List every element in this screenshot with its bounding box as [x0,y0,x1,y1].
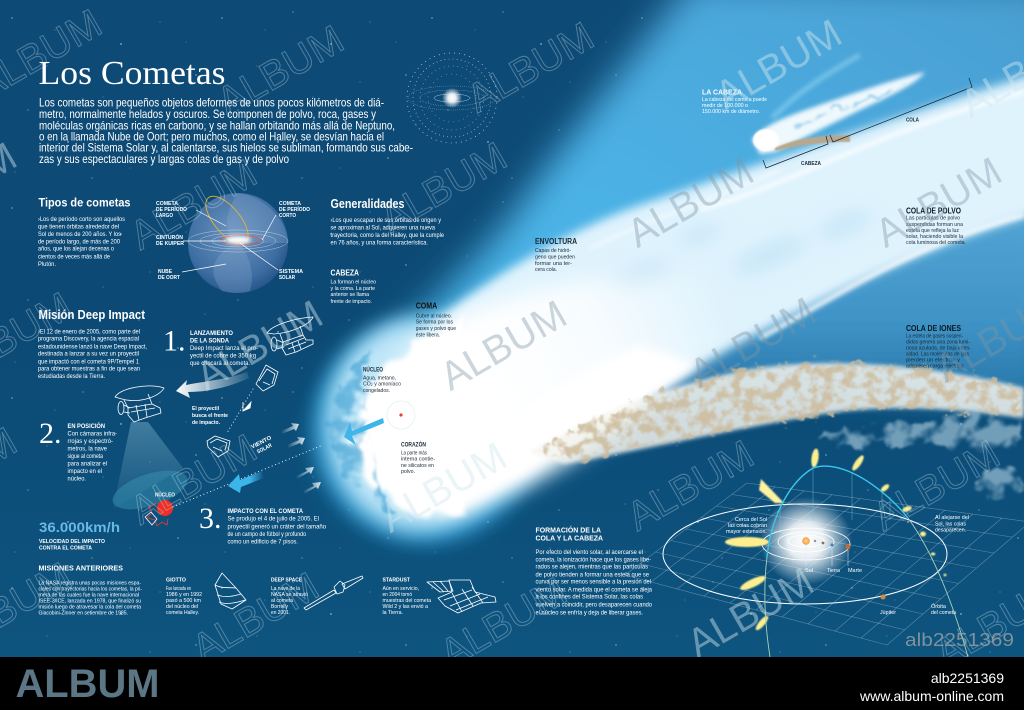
comet: coma soft light [328,320,512,530]
label: cola de polvo: suspendidas forman una [906,222,964,228]
mission: Deep Space [271,577,309,616]
sun glow [760,497,852,585]
label: corazon: CORAZÓN [401,441,426,449]
mission: Giotto: GIOTTO [166,577,186,583]
label: cabeza: CABEZA [330,269,359,278]
text: formacion: a los confines del Sistema Solar, las colas [536,594,643,601]
label: cola de iones [906,324,971,369]
heading: formacion [536,526,603,543]
icon: Deep Impact probe 1 [267,317,313,355]
stat caption: VELOCIDAD DEL IMPACTO [39,539,105,545]
stat caption [39,539,105,552]
text: Stardust: en 2004 tomó [382,592,413,598]
icon: red nucleus impact [145,500,173,526]
step 3 heading: IMPACTO CON EL COMETA [228,508,303,515]
watermarks: ALBUM [680,559,821,666]
watermarks: ALBUM [373,434,514,541]
label: al alejarse [935,515,969,534]
stat: impact speed: 36.000km/h [39,519,120,535]
mission: Giotto [166,577,202,616]
planet labels: Órbita [931,603,947,610]
icon: projectile middle [207,436,230,457]
text: generalidades: en 76 años, y una forma característica. [330,240,428,246]
label: corazon: La parte más [401,450,427,456]
text: tipos de cometas: Sol de menos de 200 años. Y los [38,231,121,238]
label: coma: COMA [416,302,437,311]
text: generalidades: ›Los que escapan de sus órbitas de origen y [330,217,442,224]
text: Stardust: Wild 2 y las envió a [382,604,429,610]
globe light wedges [213,193,288,293]
icon: Stardust probe [427,580,496,613]
intro text block: Los cometas son pequeños objetos deformes de unos pocos kilómetros de diá- [39,97,384,110]
label: coma: éste libera. [416,332,440,338]
step 1 heading: LANZAMIENTO [190,330,233,337]
section: tipos de cometas [38,196,131,268]
watermarks: ALBUM [433,292,574,399]
comet: blue lower tail region [640,180,1024,420]
text: Deep Space: NASA se atravió [271,592,309,598]
text: generalidades [330,217,444,246]
label: la cabeza [702,90,767,115]
arrow: white curved launch arrow [176,372,249,398]
globe labels: SOLAR [279,275,295,281]
watermark code: alb2251369 [905,630,1014,650]
text: proyectil busca: busca el frente [192,413,229,419]
long period orbit [198,189,256,251]
text: formacion [536,549,653,616]
label: cabeza: anterior se llama [330,292,370,298]
planet labels: Sol [805,568,813,574]
comet: white dust base [530,363,1024,464]
text: formacion: rados se alejen, mientras que las partículas [536,564,648,571]
label: envoltura [535,237,577,273]
comet: white lower edge [440,345,700,515]
step 1 text [190,345,258,367]
text: mision deep impact: ›El 12 de enero de 2005, como parte del [38,328,140,335]
comet: tail shading patches [607,207,874,293]
heading: formacion: FORMACIÓN DE LA [536,526,601,535]
label: cola de iones: COLA DE IONES [906,324,962,333]
text: formacion: curva por ser menos sensible a la presión del [536,579,651,586]
watermarks: ALBUM [620,432,761,539]
text: mision deep impact: estadounidense lanzó la nave Deep Impact, [38,343,147,350]
label: envoltura: geno que pueden [535,255,575,261]
projectile at impact [145,512,157,525]
text: generalidades: se aproximan al Sol, adquieren una nueva [330,225,435,232]
text: Deep Space: al cometa [271,598,294,604]
nucleus [157,500,173,516]
label: viento solar: VIENTO [250,435,273,451]
text: Giotto: 1986 y en 1992 [166,592,202,598]
text: misiones anteriores [38,581,142,617]
text: proyectil busca [192,406,229,426]
text: formacion: de polvo tienden a formar una estela que se [536,571,650,578]
arrows: solar wind [281,423,321,494]
comet: coma white fade [370,270,720,512]
text: Giotto: cometa Halley. [166,610,199,616]
label: al alejarse: desaparecen. [935,528,966,534]
text: mision deep impact: destinada a lanzar a su vez un proyectil [38,351,139,358]
globe labels: NUBE [158,269,173,275]
text: tipos de cometas: ›Los de período corto son aquellos [38,216,125,223]
label: cabeza small: CABEZA [801,161,821,167]
section: misiones anteriores [38,564,142,617]
label: al alejarse: Sol, las colas [935,522,966,528]
label: nucleo [363,367,401,394]
intro text block: moléculas orgánicas ricas en carbono, y se hallan orbitando más allá de Neptuno, [39,119,395,132]
globe labels: DE KUIPER [156,241,184,247]
text: Stardust: la Tierra. [382,610,403,616]
step 3: impacto con el cometa [199,502,326,546]
planet labels: del cometa [931,610,957,616]
comet orbit: pale section [765,518,968,657]
globe sphere [188,193,288,293]
comet: outer blue halo [313,318,537,542]
comet tails along orbit [725,448,946,632]
brackets: cabeza and cola [763,78,972,168]
text: mision deep impact: que impactó con el cometa 9P/Tempel 1 [38,358,139,365]
text: Stardust: Aún en servicio, [382,586,419,592]
footer logo: ALBUM [16,662,160,706]
label: envoltura: formar una ter- [535,261,572,267]
label: cola de iones: didos genera una zona lumi- [906,339,970,345]
step 1 text: Deep Impact lanza el pro- [190,345,258,352]
dotted comet path [173,445,323,507]
label: la cabeza: medir de 100.000 o [702,103,748,109]
heading: tipos de cometas: Tipos de cometas [38,196,131,210]
short period orbit [221,236,261,244]
text: misiones anteriores: Giacobini-Zinner en setiembre de 1985. [38,611,128,617]
text: Deep Space: Borrelly [271,604,288,610]
mission: Deep Space: DEEP SPACE [271,577,302,583]
label: cola de iones: nosa azulada, de baja inten- [906,345,971,351]
globe labels [156,201,310,281]
step 1: lanzamiento de la sonda [163,325,258,367]
mission: Stardust [382,577,432,616]
label: la cabeza: 150.000 km de diámetro. [702,109,760,115]
text: formacion: viento solar. A medida que el cometa se aleja [536,586,653,593]
impact burst [147,503,168,526]
comet: tail bright streaks [590,92,1024,338]
intro text block: zas y sus espectaculares y largas colas de gas y de polvo [39,153,289,166]
intro text block [39,97,413,166]
label: corazon: ne silicatos en [401,463,434,469]
text: mision deep impact: programa Discovery, la agencia espacial [38,336,139,343]
watermarks: ALBUM [866,432,1007,539]
step 3 text [228,516,326,546]
text: Deep Space: en 2001. [271,610,290,616]
small sphere: Oort cloud dots [407,53,497,143]
planet labels: Júpiter [880,610,896,616]
label: cola de iones: pierden un electrón y [906,357,960,363]
text: misiones anteriores: misión luego de atravesar la cola del cometa [38,605,142,611]
section: generalidades [330,197,444,246]
comet: blue gas envelope [340,0,1024,480]
small comet: blue wisp [772,55,860,118]
label: nucleo: congelados. [363,388,390,394]
label lines [182,210,278,272]
text: misiones anteriores: ciales con trayectorias hacia los cometas, la pri- [38,587,142,593]
text: Stardust: muestras del cometa [382,598,432,604]
globe labels: COMETA [156,201,178,207]
comet orbit: cyan section [767,466,908,557]
arrow: blue trajectory [228,471,264,493]
text: Deep Space: La nave de la [271,586,301,592]
label: corazon: interna contie- [401,457,435,463]
heading: mision deep impact: Misión Deep Impact [38,308,146,322]
globe labels: DE PERÍODO [279,205,310,213]
label: cola de polvo: estela que refleja la luz [906,228,959,234]
label: cerca del sol: Cerca del Sol [735,517,767,523]
illustration: large comet [313,0,1024,542]
globe labels: SISTEMA [279,269,303,275]
label: cabeza: La forman el núcleo [330,280,376,286]
label: la cabeza: La cabeza del cometa puede [702,97,767,103]
text: misiones anteriores: La NASA registra unas pocas misiones espa- [38,581,141,587]
orbital plane grid [625,483,1024,645]
watermarks: ALBUM [123,151,264,258]
label: cabeza: y la coma. La parte [330,286,375,292]
label: cabeza [330,269,376,305]
Jupiter orbit [663,504,947,604]
globe labels: CINTURÓN [156,233,183,241]
step 1 heading: DE LA SONDA [190,338,229,345]
globe labels: LARGO [156,213,173,219]
text: Giotto [166,586,202,616]
label: envoltura: ENVOLTURA [535,237,577,246]
diagram: comet orbits globe [156,189,310,293]
text: proyectil busca: de impacto. [192,420,220,426]
step 2 text: rrojas y espectró- [68,438,113,445]
planets [814,540,886,600]
text: formacion: vuelven a coincidir, pero desaparecen cuando [536,601,653,608]
label: nucleo: NÚCLEO [363,367,383,374]
label: cola de iones: sidad. Las moléculas de gas [906,351,969,357]
step 3 text: proyectil generó un cráter del tamaño [228,523,326,530]
watermarks: ALBUM [373,134,514,241]
watermarks: ALBUM [620,149,761,256]
text: tipos de cometas: años, que los alejan decenas o [38,246,114,253]
vertical drop lines [780,468,890,530]
text: proyectil busca: El proyectil [192,406,219,412]
label: nucleo: Agua, metano, [363,376,396,382]
comet: pale dust tail band [350,72,1024,500]
step 1 text: yectil de cobre de 350 kg [190,352,256,360]
step 3 text: Se produjo el 4 de julio de 2005. El [228,516,319,523]
stat caption: CONTRA EL COMETA [39,546,93,552]
mission: Stardust: STARDUST [382,577,410,583]
globe labels: DE OORT [158,275,181,281]
icon: observation cone [108,422,192,517]
label: coma: Se forma por los [416,320,453,326]
text: generalidades: trayectoria, como la del Halley, que la cumple [330,232,444,239]
section: formacion de la cola y la cabeza [536,526,653,616]
label: cerca del sol: mayor extensión. [726,529,767,535]
label: al alejarse: Al alejarse del [935,515,969,521]
Kuiper belt rings [188,230,288,252]
text: Giotto: pasó a 500 km [166,598,201,604]
step 1 heading [190,330,233,345]
step 2 text: sigue al cometa [68,453,103,460]
globe labels: COMETA [279,201,301,207]
solar system center [225,236,251,244]
icon: Deep Space probe [304,576,363,610]
text: tipos de cometas: que tienen órbitas alrededor del [38,223,119,230]
text: misiones anteriores: mera de las cuales fue la nave internacional [38,593,139,599]
number 2: 2. [39,417,62,450]
planet labels [805,568,957,616]
small comet: dust [775,135,850,151]
comet: coma blue mottling [326,350,400,512]
watermarks: ALBUM [185,564,326,671]
heading: generalidades: Generalidades [330,197,405,211]
comet: core [387,401,415,429]
label: cola de polvo: solar, haciendo visible la [906,234,964,240]
label: nucleo: CO₂ y amoníaco [363,382,401,388]
planet leader lines [806,545,848,566]
label: cerca del sol [726,517,767,535]
intro text block: metro, normalmente helados y oscuros. Se componen de polvo, roca, gases y [39,108,376,121]
icon: projectile top [256,365,278,391]
watermarks: ALBUM [189,292,330,399]
label: envoltura: cera cola. [535,267,557,273]
small comet: white tail [752,72,925,154]
text: Giotto: del núcleo del [166,604,198,610]
section: mision deep impact [38,308,147,380]
text: mision deep impact [38,328,147,380]
watermarks: ALBUM [682,289,823,396]
watermarks: ALBUM [433,569,574,676]
label: la cabeza: LA CABEZA [702,90,742,97]
title: Los Cometas [38,55,226,92]
label: cola de iones: La estela de gases suspen- [906,333,963,339]
label: envoltura: Capas de hidró- [535,248,571,254]
number 1: 1. [163,325,186,358]
step 2: en posicion [39,417,117,482]
number 3: 3. [199,502,222,535]
text: tipos de cometas [38,216,125,268]
text: formacion: el núcleo se enfría y deja de liberar gases. [536,609,643,616]
watermarks: ALBUM [460,14,601,121]
label: coma: Cubre al núcleo. [416,313,452,319]
heading: formacion: COLA Y LA CABEZA [536,536,603,543]
text: tipos de cometas: de período largo, de más de 200 [38,238,120,245]
step 2 text: impacto en el [68,468,102,475]
step 2 text [68,430,117,482]
label: cerca del sol: las colas cobran [728,523,767,529]
text: mision deep impact: estudiadas desde la Tierra. [38,373,105,380]
text: Giotto: Fue lanzada en [166,586,191,592]
label: coma [416,302,456,338]
text: formacion: cometa, la ionización hace que los gases libe- [536,556,651,563]
globe labels: DE PERÍODO [156,205,187,213]
comet: coma inner clouds [350,315,470,516]
text: tipos de cometas: cientos de veces más allá de [38,253,110,260]
watermarks: ALBUM [868,149,1009,256]
label: coma: gases y polvo que [416,326,456,332]
label: cola de polvo: cola luminosa del cometa. [906,240,966,246]
step 2 text: metros, la nave [68,445,107,452]
text: misiones anteriores: ISEE-3/ICE, lanzada en 1978, que finalizó su [38,599,141,605]
arrow: blue pointer at core [344,418,384,445]
inner orbits [762,528,850,560]
label: nucleo small: NÚCLEO [155,492,176,499]
footer url: www.album-online.com [859,688,1004,704]
arrow: projectile direction [243,402,251,411]
step 2 text: Con cámaras infra- [68,430,117,437]
watermarks: ALBUM [708,11,849,118]
label: cola de polvo [906,206,966,246]
stat: impact speed [39,519,120,552]
step 2 heading: EN POSICIÓN [68,421,105,430]
text: formacion: Por efecto del viento solar, al acercarse el [536,549,643,556]
illustration: small comet [752,55,925,154]
text: mision deep impact: para obtener muestras a fin de que sean [38,366,140,373]
intro text block: o en la llamada Nube de Oort; pero muchos, como el Halley, se desvían hacia el [39,130,384,143]
globe labels: CORTO [279,213,296,219]
text: Stardust [382,586,432,616]
small comet: head [753,129,779,151]
footer bar [0,657,1024,710]
small comet: tail mottling [795,85,905,130]
text: tipos de cometas: Plutón. [38,261,56,268]
label: corazon: polvo. [401,469,415,475]
step 2 text: para analizar el [68,460,107,467]
heading: misiones anteriores: MISIONES ANTERIORES [38,564,123,573]
intro text block: interior del Sistema Solar y, al calentarse, sus hielos se subliman, formando sus cabe- [39,142,413,155]
text: Deep Space [271,586,309,616]
planet labels: Tierra [827,568,841,574]
comet: pale clouds far right [825,408,1024,501]
comet: dust tail [535,361,1024,462]
label: viento solar: SOLAR [256,443,273,455]
watermarks: ALBUM [210,17,351,124]
label: cabeza: frente de impacto. [330,299,372,305]
footer image id: alb2251369 [931,670,1004,686]
diagram: comet orbit around the Sun [625,448,1024,657]
step 1 text: que chocará al cometa. [190,360,250,367]
label: corazon [401,441,435,475]
icon: Giotto probe [215,573,246,609]
dotted projectile path [227,389,253,433]
sun [802,537,810,545]
label: cola de iones: adquieren carga eléctrica. [906,363,965,369]
watermarks: ALBUM [123,426,264,533]
step 3 text: como un edificio de 7 pisos. [228,539,298,546]
step 2 text: núcleo. [68,475,86,482]
label: cola de polvo: COLA DE POLVO [906,206,961,215]
icon: Deep Impact probe 2 [115,386,164,422]
label: viento solar [250,435,276,457]
step 3 text: de un campo de fútbol y profundo [228,531,306,538]
label: cola de polvo: Las partículas de polvo [906,216,960,222]
planet labels: Marte [848,568,863,574]
label: cola: COLA [906,118,919,124]
